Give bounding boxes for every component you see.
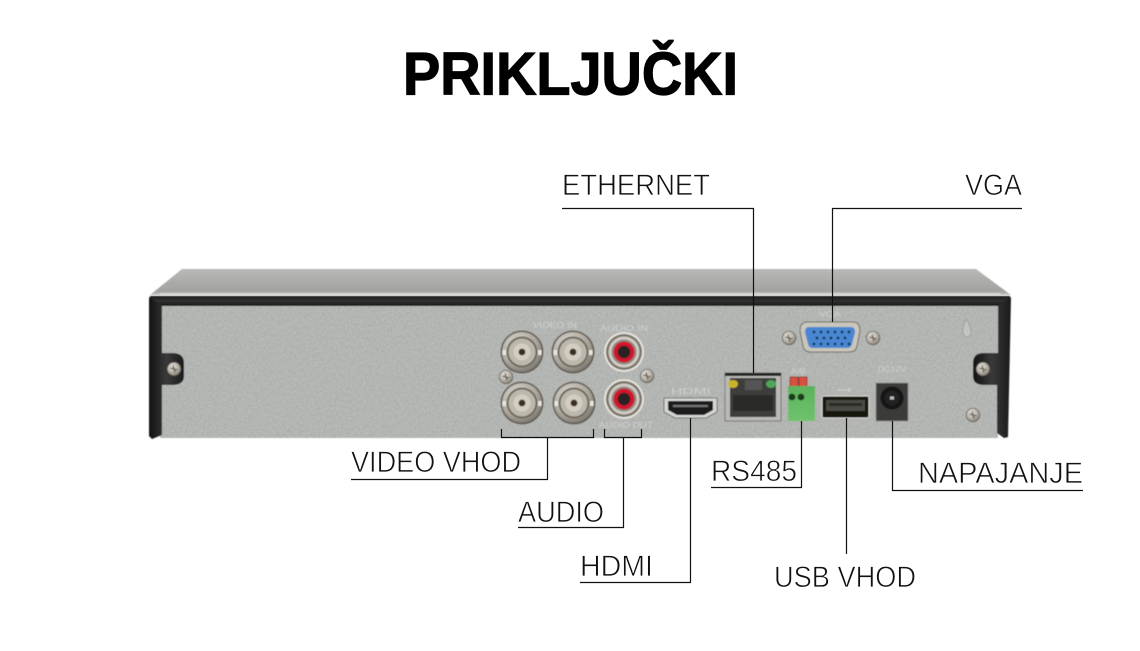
callout: NAPAJANJE: NAPAJANJE (918, 457, 1083, 490)
callout: HDMI (580, 418, 690, 583)
audio connectors: AUDIO OUT (599, 421, 653, 430)
VGA port: VGA (819, 310, 842, 319)
callout: VGA: VGA (965, 169, 1022, 202)
audio connectors: AUDIO IN (600, 324, 648, 333)
callout: AUDIO: AUDIO (518, 496, 604, 529)
callout: VGA (832, 169, 1022, 322)
Ethernet port (725, 373, 781, 421)
audio connectors (599, 324, 653, 430)
callout: USB VHOD: USB VHOD (774, 561, 916, 594)
USB port (822, 388, 869, 418)
callout: VIDEO VHOD (351, 429, 594, 480)
RS485 terminal (788, 367, 815, 421)
callout: VIDEO VHOD: VIDEO VHOD (351, 446, 521, 479)
left bracket (149, 297, 184, 439)
HDMI port: HDMI (671, 387, 711, 396)
video input connectors: VIDEO IN (533, 321, 577, 330)
video input connectors (500, 321, 596, 424)
mounting screws (167, 362, 990, 422)
HDMI port (664, 387, 717, 418)
DVR rear panel device (149, 269, 1011, 439)
right bracket (973, 297, 1011, 438)
callout: HDMI: HDMI (580, 550, 653, 583)
callout: ETHERNET (562, 169, 754, 373)
back panel (160, 305, 998, 438)
callout: AUDIO (518, 429, 642, 529)
callout: RS485 (711, 421, 802, 488)
callout: ETHERNET: ETHERNET (562, 169, 710, 202)
RS485 terminal: A/B (791, 367, 806, 376)
callout: RS485: RS485 (711, 455, 797, 488)
top lid (150, 269, 1011, 295)
VGA port (782, 310, 880, 352)
power socket: DC12V (878, 365, 907, 374)
title: PRIKLJUČKI (403, 40, 738, 108)
power socket (876, 365, 908, 421)
dark top band (150, 296, 1010, 306)
ground hook (963, 319, 971, 337)
callout: NAPAJANJE (892, 421, 1083, 490)
